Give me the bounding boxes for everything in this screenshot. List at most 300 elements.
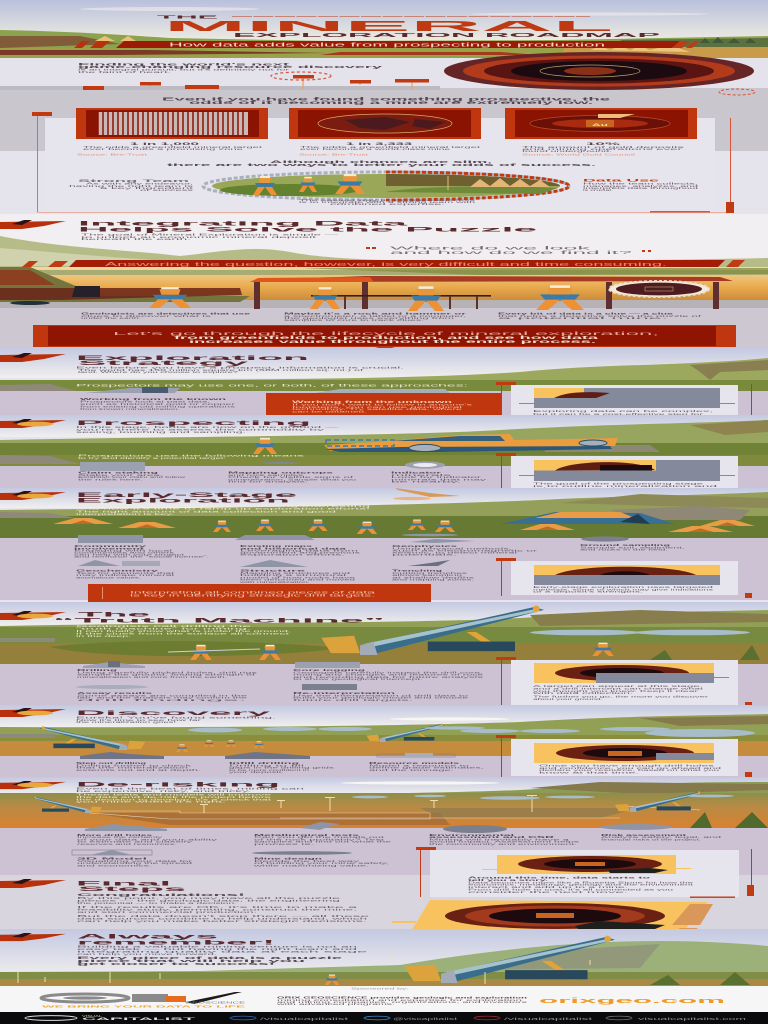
map panel 4: with data collection.: [533, 691, 634, 695]
early stage methods: [74, 534, 686, 584]
captions: Every bit of data is a clue — a clue: [498, 312, 674, 316]
discovery methods: to be more confident in: [229, 768, 310, 772]
dusk ground: [0, 267, 768, 301]
map panel 2: The goal of the prospecting stage: [533, 482, 704, 486]
section title: “Truth Machine”: [53, 618, 385, 625]
map panel 6: interact and add up to a mine.: [468, 885, 629, 889]
discovery methods: and the tonnage.: [369, 768, 455, 772]
header hero: [0, 0, 768, 60]
intro band: [0, 52, 768, 151]
prospecting methods: Claim staking: [78, 471, 159, 475]
surveyor: [325, 975, 339, 985]
gear scan: [609, 281, 709, 297]
discovery methods: Resource models: [369, 761, 460, 765]
discovery methods: define grade estimates,: [369, 766, 485, 770]
de-risking methods: of your data and your ability: [77, 837, 219, 841]
approach: known: from known mineralization.: [80, 407, 181, 411]
map panel 1: [496, 382, 752, 423]
section: final steps: [0, 879, 713, 934]
de-risking methods: and economics.: [77, 863, 153, 867]
discovery methods: Step out drilling: [76, 761, 146, 765]
ellipse caption: is to integrate with a strong team with: [299, 200, 476, 204]
discovery methods: Model a resource to: [369, 763, 470, 767]
data use text: Data Use: [583, 179, 660, 183]
section text: [76, 786, 306, 804]
camp domes: [352, 795, 734, 800]
odds heading: [162, 96, 613, 105]
early stage methods: Trenching: [392, 569, 443, 573]
title: dashed rule: [232, 16, 590, 18]
approach: unknown: footsteps, you can use geological: [292, 405, 463, 409]
section text: land. Where do you choose to explore?: [78, 370, 239, 374]
banner: [22, 260, 745, 268]
map panel 6: [416, 847, 754, 898]
icon: chevron: [0, 708, 66, 717]
section: exploration strategy: [0, 348, 768, 423]
prospecting methods: Establish your claim and follow: [78, 475, 187, 479]
social handles: /visualcapitalist: [260, 1017, 348, 1021]
section title: [76, 880, 189, 893]
early stage methods: Engaging with local: [74, 549, 173, 553]
de-risking methods: Analyze safety, legal, and: [601, 835, 722, 839]
drill sample: [393, 488, 460, 500]
logo: [41, 992, 246, 1009]
truth machine methods: Assay results: [77, 691, 153, 695]
title: mineral: MINERAL: [164, 19, 614, 35]
stat 10 percent: The amount of gold deposits: [522, 145, 686, 149]
early stage methods: at shallow depths: [392, 575, 476, 579]
discovery methods: that the mineralization: [76, 766, 190, 770]
approach: unknown: technology. Try satellite data, where: [292, 407, 463, 411]
section: integrating data: [0, 214, 768, 350]
approach: unknown: can be obtained.: [292, 409, 368, 413]
section text: [76, 624, 292, 638]
approach: known: [80, 387, 237, 411]
section text: integrating quality data at each stage: [77, 950, 369, 954]
section text: get closer to success!: [77, 962, 275, 966]
prospecting methods: find for analysis.: [228, 480, 309, 484]
prospecting methods: be nearby.: [391, 480, 462, 484]
section text: [77, 945, 369, 966]
icon: chevron: [0, 220, 66, 229]
visual capitalist logo: VISUAL: [82, 1014, 103, 1018]
map panel 4: and a drill intercept can change what: [533, 686, 704, 690]
data use text: How the team collects,: [583, 182, 699, 186]
discovery methods: gaps in the drilling grids: [229, 766, 336, 770]
drill callout: Interpreting all combined pieces of data: [130, 591, 376, 595]
core scan ellipse: [444, 52, 754, 90]
early stage methods: and mapping zones.: [392, 578, 475, 582]
intro text: Finding the world's next: [78, 61, 292, 66]
hill with excavator: [0, 267, 250, 305]
section text: Even at the best of times, mining can: [76, 786, 306, 790]
section text: Prospectors may use one, or both, of these approaches:: [76, 383, 468, 387]
section text: The world has 150 million square km (58M million sq. mi.) of: [78, 368, 364, 372]
panel: odds and success: [32, 108, 734, 213]
early stage methods: Geophysics: [392, 544, 458, 548]
de-risking methods: the community and environment.: [429, 842, 578, 846]
truth machine methods: [76, 661, 485, 702]
quote: Where do we look: [390, 246, 593, 252]
hills: [0, 236, 768, 270]
stat 1 in 3333: ever becomes a world-class mine: [300, 147, 451, 151]
map panel 1: but it can be a cost-effective step for: [533, 412, 703, 416]
lifecycle panel: [33, 325, 736, 350]
prospecting methods: mineralization. Sample what you: [228, 477, 357, 481]
section text: [76, 715, 277, 724]
subtitle banner: How data adds value from prospecting to production: [169, 43, 605, 49]
captions: clues to discover what is: [81, 314, 213, 318]
section text: Prospectors use the following means: [78, 454, 307, 458]
section text: you mine where it's right.: [76, 800, 227, 804]
section text: to try and identify a potential target:: [78, 456, 227, 460]
early stage methods: seismic, to detect mineral: [392, 551, 518, 555]
early stage methods: Involvement: [74, 546, 144, 550]
early stage methods: exploration efforts.: [240, 553, 346, 557]
odds heading: odds of it becoming a mine are extremely low.: [189, 100, 593, 105]
de-risking methods: assessment and CSR: [429, 835, 557, 839]
drill callout: is key in identifying strategic drill targets.: [130, 594, 375, 598]
grass: [650, 645, 760, 660]
section text: Geologists call drilling the: [76, 624, 253, 628]
early stage methods: with mineralization.: [240, 580, 311, 584]
stat 10 percent: 10%: [586, 142, 624, 146]
section title: De-risking: [76, 781, 281, 788]
data use text: manages, analyzes, and: [583, 184, 699, 188]
section text: seeing, touching and sampling.: [76, 430, 247, 434]
section title: remember!: [77, 940, 275, 947]
intro text: is an integral pursuit, but it's definitely not for: [78, 68, 289, 72]
section title: Prospecting: [76, 420, 311, 427]
stat 1 in 1000: 1 in 1,000: [130, 142, 199, 146]
drill rig: [404, 936, 615, 983]
section text: "truth machine" for mining.: [76, 626, 252, 630]
grass: [650, 972, 750, 985]
drill callout: [88, 584, 431, 602]
survey stakes: [18, 955, 590, 984]
de-risking methods: social impact. Assessment helps: [429, 840, 581, 844]
section text: piece that will help you: [77, 959, 309, 963]
map panel 1: finding your next prospect.: [533, 415, 684, 419]
early stage methods: government and previous: [240, 551, 362, 555]
section text: interpretation is key.: [76, 512, 175, 516]
approach: known: Prospectors look at past data,: [80, 400, 211, 404]
odds heading: Even if you have found something prospective, the: [162, 96, 613, 101]
early stage methods: anomalous values.: [76, 575, 142, 579]
early stage methods: can help with your project: [74, 553, 185, 557]
section text: By this point, you may have all the puzzle: [77, 896, 342, 900]
de-risking methods: Can you get the metals out: [254, 835, 385, 839]
section text: Now it's time to see how far: [76, 718, 201, 722]
captions: that helps a detective solve the puzzle of: [498, 314, 702, 318]
early stage methods: Geochemistry: [76, 569, 159, 573]
data use text: is crucial.: [583, 188, 613, 192]
clouds: [80, 7, 710, 16]
sponsor text: [277, 996, 529, 1006]
section text: The right amount of data collection and good: [76, 510, 338, 514]
sponsor text: with advanced programs.: [277, 1002, 396, 1006]
claim stakes: [83, 72, 755, 95]
intro text: game-changing resource discovery: [78, 64, 385, 69]
captions: Maybe it's a rock and hammer or: [284, 312, 469, 316]
stat 1 in 1000: The odds a greenfield mineral target: [83, 145, 263, 149]
section text: In this stage, boots are now on the ground —: [76, 425, 338, 429]
data use text: [583, 179, 699, 192]
workers with data: [149, 285, 584, 311]
section text: to unlock an economic mineral deposit: [81, 235, 317, 239]
section text: Building a valuable mining venture is not an: [77, 945, 359, 949]
map panel 4: A target can appear at this stage,: [533, 684, 704, 688]
logo: WE BRING YOUR DATA TO LIFE: [42, 1005, 245, 1009]
quote: and how do we find it?: [390, 250, 634, 256]
section title: Helps Solve the Puzzle: [78, 227, 541, 234]
strong team text: As with any endeavor,: [86, 182, 194, 186]
map panel 6: tell you a story.: [468, 878, 549, 882]
de-risking methods: Environmental: [429, 833, 515, 837]
prospecting methods: Stake your area.: [78, 473, 164, 477]
stat 1 in 1000: [76, 108, 268, 156]
section title: Integrating Data: [78, 221, 411, 228]
section text: the potential — to make a decision.: [77, 901, 238, 905]
captions: Geologists are detectives that use: [81, 312, 251, 316]
section text: feasibility study, permitting, construct the mine,: [77, 907, 358, 911]
map panel 6: consider the next move.: [468, 890, 629, 894]
discovery methods: Drilling further to check: [76, 763, 193, 767]
map panel 4: [496, 657, 752, 707]
prospecting methods: minerals that may: [391, 477, 488, 481]
map panel 2: [496, 453, 752, 493]
discovery methods: Infill drilling: [229, 761, 300, 765]
section: discovery: [0, 705, 768, 778]
footer: social bar: [0, 1012, 768, 1024]
drill rig: [321, 606, 544, 655]
prospecting methods: the rules here.: [78, 477, 144, 481]
map panel 3: of a deposit's strengths.: [533, 590, 644, 594]
de-risking methods: reserves and resources.: [77, 842, 178, 846]
stat 10 percent: and mining operations ever: [522, 147, 682, 151]
quote: [366, 246, 651, 256]
early stage methods: may indicate mineral: [76, 573, 175, 577]
section title: [78, 221, 541, 234]
footer: sponsor: [0, 986, 768, 1012]
ways heading: there are two ways to better your odds of success.: [167, 162, 596, 167]
website: orixgeo.com: [539, 998, 725, 1005]
captions: [81, 312, 702, 322]
truth machine methods: lab, and the analysis may confirm the: [77, 696, 248, 700]
section: de-risking: [0, 777, 768, 929]
early stage methods: such as electromagnetic or: [392, 549, 537, 553]
prospecting methods: minerals: [391, 473, 454, 477]
early stage methods: Test for elements that: [76, 571, 175, 575]
logo: GEOSCIENCE: [185, 1000, 246, 1004]
discovery methods: extends out and at depth.: [76, 768, 202, 772]
icon: chevron: [0, 353, 66, 362]
title: exploration roadmap: EXPLORATION ROADMAP: [233, 33, 664, 39]
icon: chevron: [0, 933, 66, 941]
banner: Answering the question, however, is very difficult and time consuming.: [105, 262, 667, 268]
discovery methods: [76, 752, 485, 774]
visual capitalist logo: CAPITALIST: [82, 1017, 199, 1021]
ways heading: Although chances are slim,: [270, 159, 492, 164]
map panel 4: The further you go, the more you discover: [533, 695, 708, 699]
section text: [77, 893, 371, 923]
map panel 6: From drill hole to cost, it's all connected as you: [468, 888, 674, 892]
truth machine methods: build your geologic model and choose: [293, 696, 469, 700]
map panel 6: Around this time, data starts to: [468, 876, 651, 880]
prospecting methods: Mapping outcrops: [228, 471, 334, 475]
prospecting methods: Indicator: [391, 471, 444, 475]
shelter: [250, 276, 733, 309]
section text: the data and de-risk the project before: [76, 795, 273, 799]
section text: It can finally show what is under the ground,: [76, 629, 292, 633]
de-risking methods: Increase the certainty: [77, 835, 164, 839]
subtitle banner: [74, 41, 700, 49]
section text: But the data doesn't stop there — all these: [77, 914, 371, 918]
de-risking methods: understanding the spread: [77, 861, 193, 865]
drill rigs: [33, 791, 702, 813]
stat 10 percent: [505, 108, 697, 156]
stat 10 percent: Au: [592, 122, 610, 127]
prospecting methods: and rock samples: [228, 473, 305, 477]
early stage methods: Structure: [240, 569, 307, 573]
prospecting methods: Check for visible signs of: [228, 475, 354, 479]
intro text: the faint of heart.: [78, 70, 172, 74]
drill rigs: [40, 723, 445, 752]
data use text: interprets data throughout: [583, 186, 699, 190]
section title: [76, 355, 309, 367]
lifecycle panel: Let's go through the lifecycle of mineral exploration,: [113, 331, 659, 336]
truth machine methods: and recording data for future analysis: [293, 675, 485, 679]
truth machine methods: Drilling: [77, 668, 118, 672]
captions: a spectrometer, a tablet or a computer,: [284, 314, 467, 318]
truth machine methods: drill findings.: [77, 698, 249, 702]
workers at rig: [168, 643, 614, 660]
intro text: [78, 61, 385, 74]
section title: Exploration: [76, 355, 309, 362]
camp tents and team: [53, 512, 755, 534]
truth machine methods: Use the interpretation of drill data to: [293, 693, 469, 697]
section text: the mineralization goes!: [76, 720, 177, 724]
section title: Exploration: [76, 498, 290, 505]
map panel 5: declare your resource, based on what you: [539, 768, 720, 772]
section text: and now it's time to ramp up exploration efforts!: [76, 507, 371, 511]
section text: If the results are OK, it's time to make a: [77, 905, 359, 909]
de-risking methods: [72, 822, 722, 867]
captions: the geologist uses everything from: [284, 316, 456, 320]
drill grid field: [90, 795, 700, 819]
de-risking methods: Metallurgical tests: [254, 833, 360, 837]
de-risking methods: More drill holes: [77, 833, 153, 837]
camp domes: [188, 726, 755, 737]
map panel 6: Data becomes more like a Rosetta Stone for how the: [468, 880, 694, 884]
de-risking methods: financial risks of the project.: [601, 837, 702, 841]
approach: known: such as historical gold or copper: [80, 402, 235, 406]
section text: can help you move forward.: [77, 952, 218, 956]
sponsor text: ORIX GEOSCIENCE provides geologic and exploration: [277, 996, 527, 1000]
section text: Congratulations!: [77, 893, 245, 897]
section text: easy task — but having the right team and: [77, 947, 359, 951]
section: always remember: [0, 929, 768, 986]
early stage methods: Ground sampling: [580, 543, 671, 547]
map panel 5: Once you have enough drill holes: [539, 763, 716, 767]
icon: chevron: [0, 879, 66, 888]
section title: Strategy: [78, 360, 250, 367]
ellipse caption: [299, 198, 477, 206]
grass: [690, 812, 768, 828]
early stage methods: Community: [74, 544, 147, 548]
section text: Every piece of data is a puzzle: [77, 956, 342, 960]
truck: [324, 434, 618, 452]
approach: unknown: Working from the unknown: [292, 400, 452, 404]
early stage methods: been deformed and moved: [240, 578, 356, 582]
section title: [77, 934, 275, 947]
section title: Discovery: [76, 710, 272, 717]
section text: can help you make better strategic decisions.: [77, 919, 368, 923]
section text: if the clues from the surface all connect: [76, 631, 290, 635]
de-risking methods: Risk assessment: [601, 833, 686, 837]
prospector: [253, 438, 277, 454]
stat 1 in 1000: Source: Bre-Trust: [77, 152, 148, 156]
early stage methods: Cutting trenches: [392, 571, 469, 575]
stat 1 in 3333: The odds a greenfield mineral target: [300, 145, 481, 149]
early stage methods: Sample soil, sediment,: [580, 545, 686, 549]
map panel 3: Early-stage exploration uses targeted: [533, 585, 714, 589]
de-risking methods: 3D Model: [77, 857, 148, 861]
de-risking methods: to estimate and classify: [77, 840, 194, 844]
approach: unknown: If you don't want to follow in anyone's: [292, 402, 474, 406]
captions: samples to core to track clues.: [284, 318, 425, 322]
sponsor text: and mining companies, organizations, and investors: [277, 1000, 529, 1004]
discovery methods: Drilling to fill: [229, 763, 306, 767]
de-risking methods: of building your mine safely,: [254, 861, 390, 865]
early stage methods: building a structural: [240, 573, 347, 577]
truth machine methods: Geologists carefully inspect the drill core,: [293, 670, 484, 674]
source note: Sponsored by:: [351, 986, 410, 990]
map panel 5: and confidence, you can go ahead and: [539, 766, 722, 770]
discovery methods: your deposit.: [229, 770, 285, 774]
section title: The: [78, 611, 153, 618]
early stage methods: model of how rocks have: [240, 575, 356, 579]
early stage methods: Leveraging data from: [240, 549, 361, 553]
section text: [76, 504, 372, 516]
icon: chevron: [0, 491, 66, 500]
early stage methods: Mapping structures and: [240, 571, 351, 575]
strong team text: of success: [140, 188, 195, 192]
map panel 3: methods, some of which may give indications: [533, 587, 715, 591]
icon: chevron: [0, 611, 66, 620]
section text: These tests and models will improve: [76, 793, 273, 797]
section title: [53, 611, 385, 625]
section text: [76, 365, 468, 387]
section text: you're there to assess the commodity by: [76, 427, 327, 431]
social handles: visualcapitalist.com: [638, 1017, 747, 1021]
map panel 5: know at that time.: [539, 770, 640, 774]
de-risking methods: of the rock profitably? Test: [254, 837, 385, 841]
section text: be expensive, risky, and tricky.: [76, 789, 252, 793]
icon: chevron: [0, 781, 66, 789]
strong team text: Strong Team: [78, 179, 189, 183]
ellipse caption: The easiest way to increase success: [299, 198, 477, 202]
teams and data ellipse: [203, 172, 569, 200]
section text: the decision to develop: it's a check that: [76, 797, 272, 801]
de-risking methods: samples and find out what the: [254, 840, 392, 844]
early stage methods: allows sampling: [392, 573, 463, 577]
approach: unknown: [266, 389, 501, 415]
section text: in the deep.: [76, 634, 132, 638]
section text: [81, 232, 339, 241]
lifecycle panel: from greenfields to production, and see how data: [174, 335, 601, 340]
map panel 4: you thought you knew. Keep it clear: [533, 689, 698, 693]
